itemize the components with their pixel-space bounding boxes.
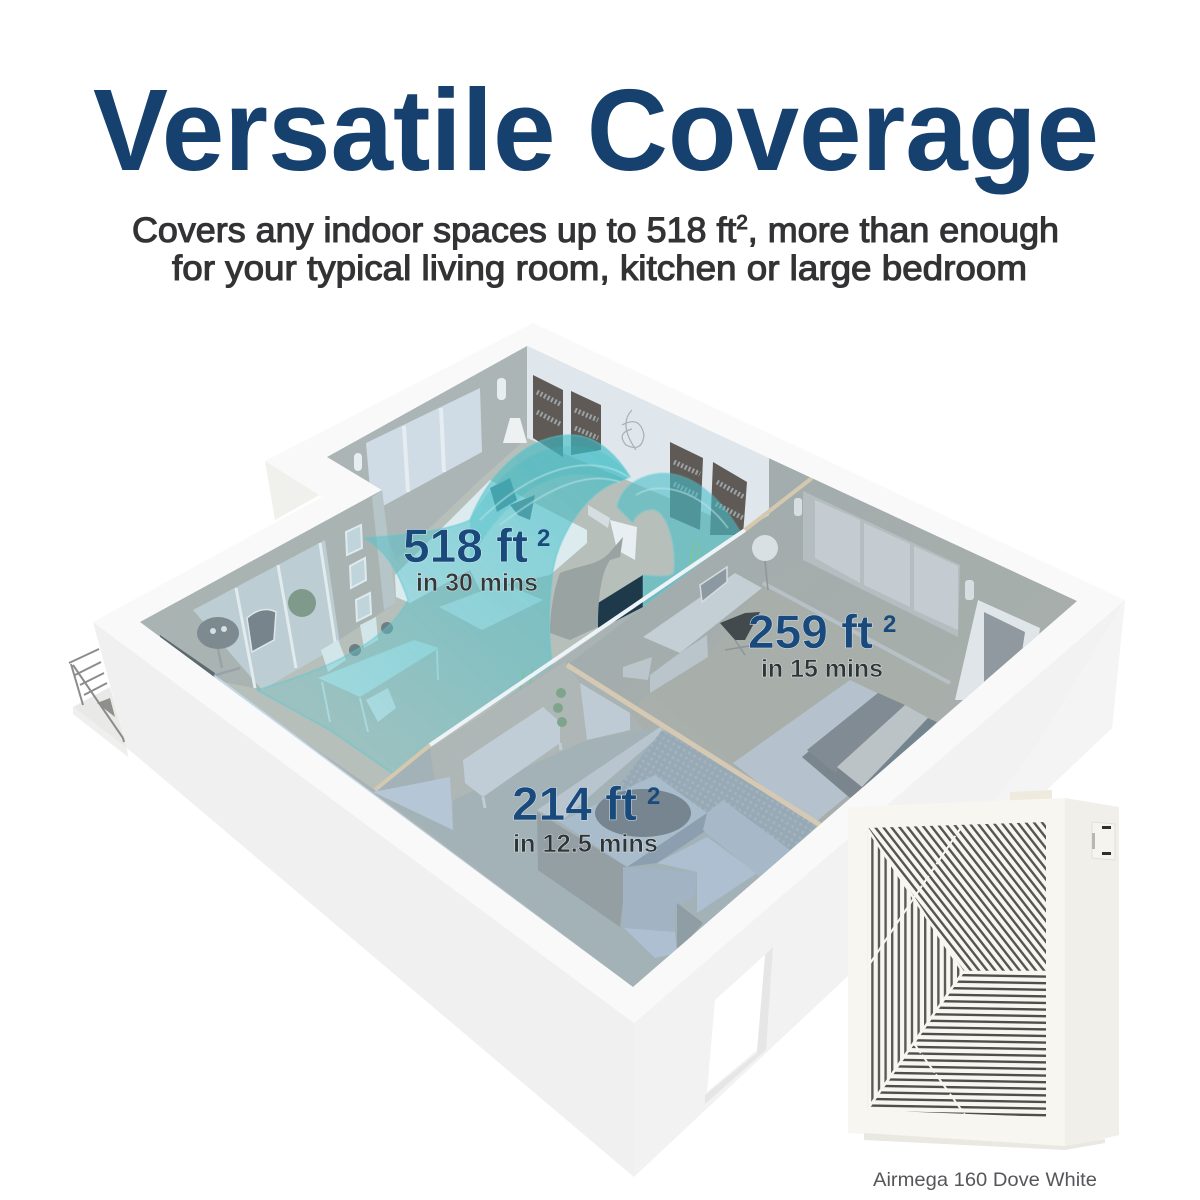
office chair <box>720 612 760 640</box>
hall door <box>580 683 630 740</box>
exterior door <box>705 947 773 1104</box>
left exterior wall <box>93 622 634 1177</box>
small purifier <box>610 520 637 560</box>
area label 518 ft2: 2 <box>537 525 550 552</box>
bookcase wall <box>527 346 769 530</box>
area label 518 ft2: 518 ft <box>403 519 528 572</box>
subtitle: , more than enough <box>748 211 1059 250</box>
sink counter <box>703 800 790 877</box>
bath partition top <box>537 727 665 822</box>
area label 214 ft2: in 12.5 mins <box>513 830 658 858</box>
wall sconces <box>794 498 974 600</box>
bathroom tile wall <box>600 730 820 850</box>
balcony railing <box>69 649 128 757</box>
inner arch band <box>470 446 630 560</box>
wall art <box>622 410 644 450</box>
balcony table <box>197 617 240 678</box>
subtitle: 2 <box>736 212 748 234</box>
coffee table <box>439 583 543 630</box>
bookcases <box>533 375 747 535</box>
upper back wall <box>328 346 527 536</box>
partition lines <box>375 478 820 825</box>
area label 259 ft2: in 15 mins <box>761 655 883 683</box>
dark sill <box>160 635 215 677</box>
desk <box>643 573 762 653</box>
living room floor <box>219 438 674 789</box>
book rows <box>537 392 744 518</box>
dining chairs <box>321 617 396 722</box>
area label 259 ft2: 2 <box>883 611 896 638</box>
subtitle: for your typical living room, kitchen or large bedroom <box>172 249 1027 288</box>
living plants <box>520 540 700 690</box>
purifier front <box>848 798 1065 1148</box>
right wall lighter facet <box>900 600 1125 930</box>
tv <box>598 575 643 630</box>
notch wall <box>265 461 323 520</box>
right exterior wall <box>634 600 1125 1177</box>
balcony glass door <box>193 540 340 690</box>
purifier side <box>1065 798 1119 1148</box>
hall wall <box>430 662 587 830</box>
cabinet <box>463 707 560 797</box>
grille stripes <box>867 822 1046 1117</box>
bath floor tile <box>657 837 757 913</box>
niches <box>346 525 371 621</box>
balcony chair <box>247 610 276 652</box>
area label 518 ft2: in 30 mins <box>416 569 538 597</box>
air purifier <box>848 790 1119 1150</box>
top wall surface <box>93 323 1125 1023</box>
bedroom floor <box>650 583 950 790</box>
bathroom and hall <box>373 662 820 987</box>
area label 214 ft2: 214 ft <box>512 777 637 830</box>
dining table <box>318 640 439 697</box>
bed <box>802 693 928 798</box>
product caption: Airmega 160 Dove White <box>873 1169 1097 1191</box>
mirror <box>955 600 1040 700</box>
left wall with glass door <box>140 490 396 690</box>
second arch <box>617 473 741 607</box>
plant <box>288 589 316 617</box>
left door <box>373 777 453 830</box>
monitor <box>700 567 727 602</box>
subtitle: Covers any indoor spaces up to 518 ft <box>132 211 722 250</box>
floor plan: outer shell <box>93 323 1125 1177</box>
partition side <box>537 812 627 927</box>
bedroom wall <box>642 458 1077 825</box>
area label 259 ft2: 259 ft <box>748 605 873 658</box>
low wall stub <box>677 903 703 953</box>
hall floor <box>375 727 820 987</box>
area label 518 ft2 <box>403 519 550 597</box>
flowers <box>349 622 393 656</box>
top handle <box>1010 790 1052 802</box>
bath door <box>623 867 697 932</box>
side control panel <box>1092 822 1115 860</box>
sconces <box>354 378 506 471</box>
area label 214 ft2 <box>512 777 660 858</box>
plants <box>553 688 567 727</box>
front glass strip <box>212 675 633 987</box>
tub <box>560 775 707 867</box>
living room <box>140 346 769 790</box>
bed platform <box>733 680 937 825</box>
area label 259 ft2 <box>748 605 896 683</box>
window <box>366 388 482 512</box>
pillar <box>372 490 396 610</box>
grey arrow <box>550 537 623 640</box>
round lamp <box>752 535 778 561</box>
main sweep <box>257 435 630 775</box>
bedroom windows <box>803 491 960 637</box>
lamp <box>503 418 527 443</box>
bedroom <box>623 458 1077 825</box>
area label 214 ft2: 2 <box>647 783 660 810</box>
apartment interior <box>140 346 1077 987</box>
subtitle <box>132 211 1059 288</box>
purifier base <box>864 1133 1105 1150</box>
title: Versatile Coverage <box>93 65 1099 195</box>
sofa <box>395 480 587 603</box>
teal airflow <box>257 435 741 775</box>
flow lines <box>480 465 728 528</box>
interior base <box>140 346 1077 987</box>
baseboard <box>763 583 950 683</box>
